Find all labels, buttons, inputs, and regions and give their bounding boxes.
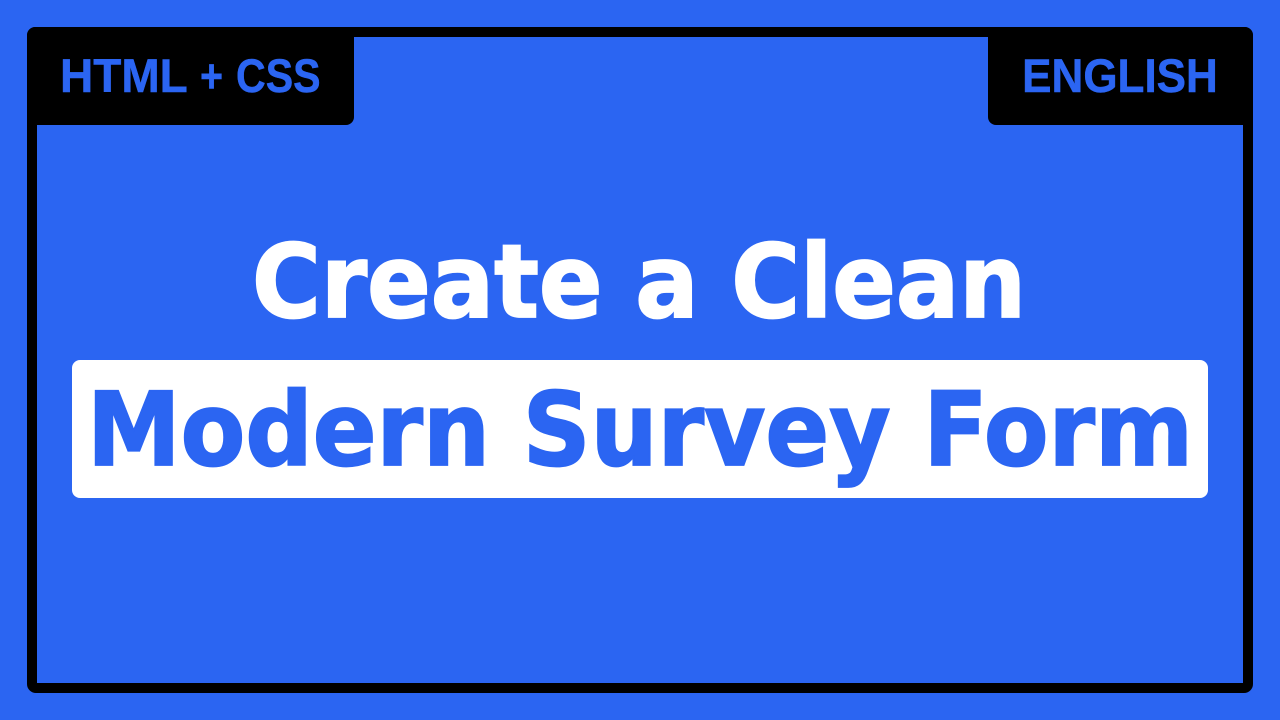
badge: ENGLISH: [988, 27, 1253, 125]
title line one: Create a Clean: [252, 223, 1026, 342]
badge: HTML + CSS: HTML: [60, 50, 188, 102]
badge: HTML + CSS: [27, 27, 354, 125]
title highlight box: Modern Survey Form: [87, 371, 1193, 490]
badge: HTML + CSS: CSS: [236, 50, 321, 103]
badge: ENGLISH: ENGLISH: [1022, 50, 1218, 102]
badge: HTML + CSS: +: [200, 51, 223, 103]
